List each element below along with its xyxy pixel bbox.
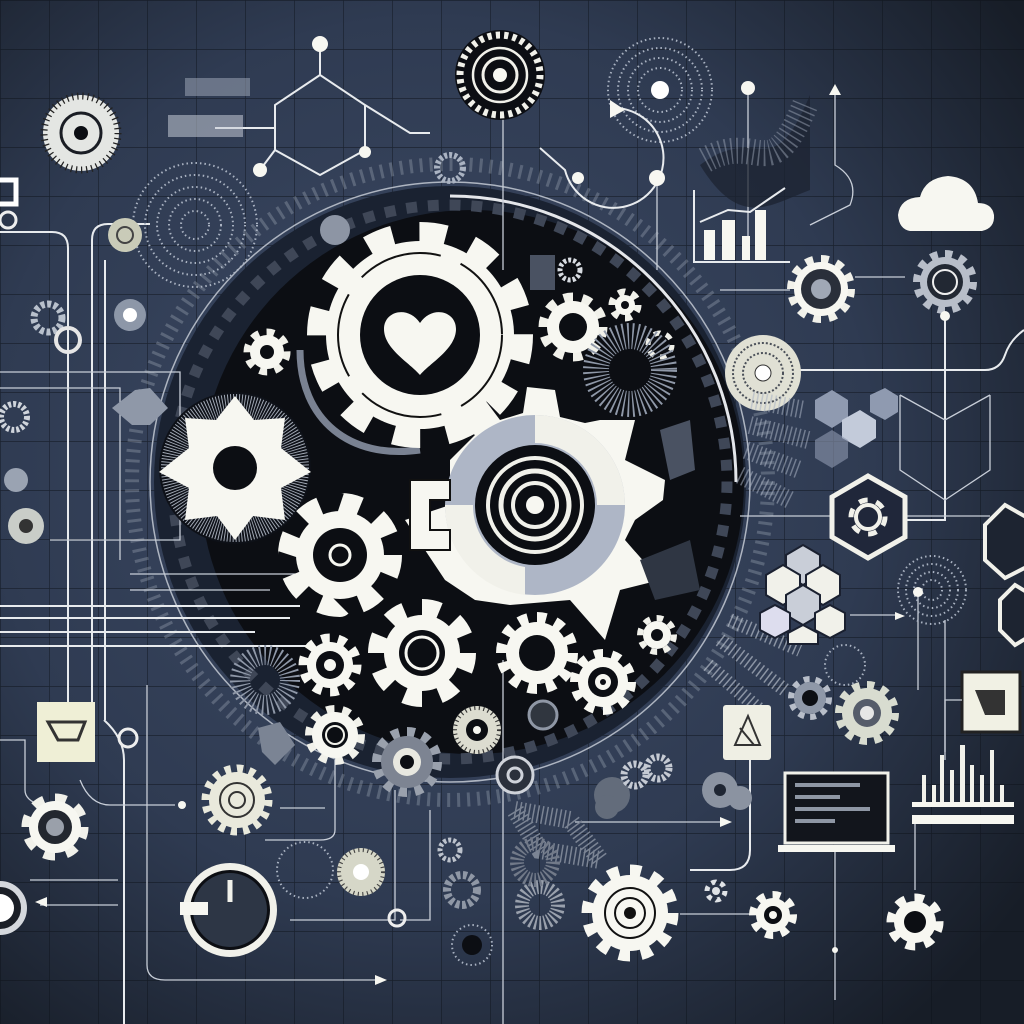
grey gear cluster lower xyxy=(594,757,752,819)
hexagon cluster blue xyxy=(815,388,898,468)
hexagon gear icon xyxy=(832,476,905,558)
fan hatching right of circle xyxy=(708,400,808,710)
note card far right xyxy=(945,672,1020,752)
gear lower centre xyxy=(379,610,465,696)
central black disc xyxy=(132,164,768,800)
small grey icons left xyxy=(0,180,168,544)
gear far lower left xyxy=(26,798,84,856)
dial gauge xyxy=(180,863,277,957)
gear bottom centre xyxy=(277,840,558,965)
open circle arrow diagram xyxy=(540,100,664,208)
right upper gears xyxy=(791,254,973,321)
gear lower right 2 xyxy=(575,654,631,710)
connector lines: right network xyxy=(503,80,1024,1024)
laptop icon xyxy=(778,773,895,852)
bright dotted disc right of circle xyxy=(725,335,801,411)
bottom right gears xyxy=(588,871,939,955)
dotted sphere upper left xyxy=(133,163,257,287)
gear bottom left centre xyxy=(206,769,268,831)
gear lower left xyxy=(303,638,357,692)
star gear inside hatched circle xyxy=(159,392,311,544)
small gears in disc xyxy=(240,155,700,705)
gear left bottom edge xyxy=(0,884,24,932)
top concentric target xyxy=(455,30,545,120)
mid right gears xyxy=(791,645,895,741)
gear lower right 1 xyxy=(502,618,572,688)
bar chart lower right xyxy=(912,745,1014,824)
gear mid left xyxy=(290,505,390,605)
small circular nodes xyxy=(35,81,923,985)
note card lower left xyxy=(37,702,95,762)
large gear with heart xyxy=(320,235,520,435)
icon: cloud xyxy=(898,176,994,231)
note card centre right xyxy=(723,705,771,760)
connector lines: left circuit xyxy=(0,224,430,1024)
large central gear xyxy=(405,387,665,640)
icon: heart xyxy=(384,312,456,375)
top left gear xyxy=(43,95,119,171)
top molecule diagram xyxy=(168,36,430,177)
dotted wave texture xyxy=(700,95,810,208)
gears lower centre disc edge xyxy=(258,701,600,860)
bar chart top right xyxy=(694,188,790,262)
honeycomb cluster xyxy=(760,545,845,644)
right edge hex icons xyxy=(985,505,1024,645)
dotted sphere top right xyxy=(608,38,712,142)
dotted sphere right xyxy=(898,556,966,624)
